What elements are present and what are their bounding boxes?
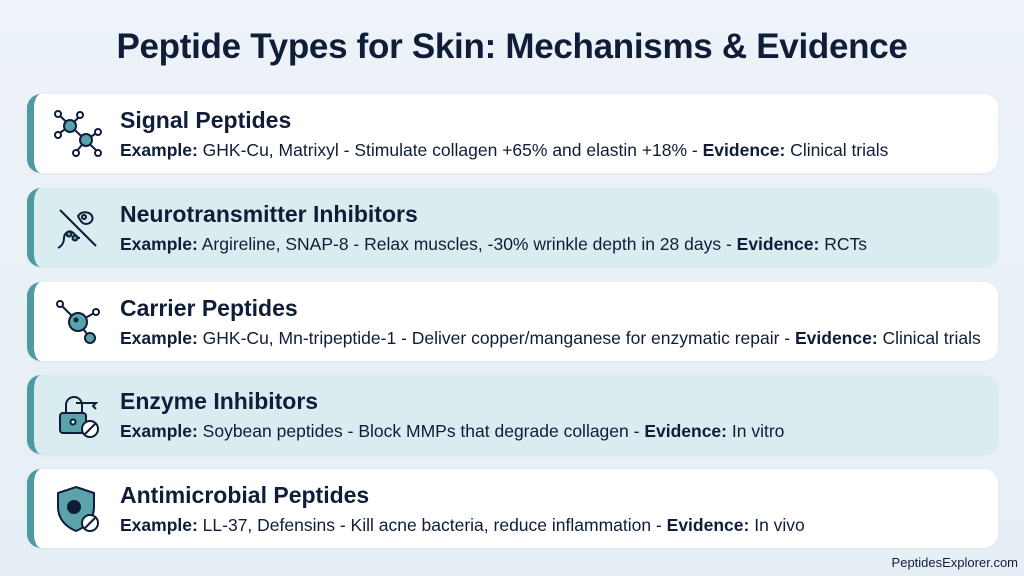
icon: molecule: [54, 110, 102, 157]
text: Example: GHK-Cu, Mn-tripeptide-1 - Deliver copper/manganese for enzymatic repair - Evidence: Clinical trials: [120, 328, 981, 348]
title: Peptide Types for Skin: Mechanisms & Evidence: [116, 27, 908, 66]
icon: carrier molecule: [56, 300, 100, 344]
heading: Signal Peptides: [120, 107, 291, 133]
panel: signal peptides: [27, 94, 998, 173]
panel: neurotransmitter inhibitors: [27, 188, 998, 267]
icon: nerve blocked: [58, 209, 97, 249]
icon: shield: [57, 486, 99, 532]
text: Example: Soybean peptides - Block MMPs that degrade collagen - Evidence: In vitro: [120, 421, 784, 441]
panel: antimicrobial peptides: [27, 469, 998, 548]
heading: Neurotransmitter Inhibitors: [120, 201, 418, 227]
text: Example: Argireline, SNAP-8 - Relax muscles, -30% wrinkle depth in 28 days - Evidence: RCTs: [120, 234, 867, 254]
heading: Antimicrobial Peptides: [120, 482, 369, 508]
icon: lock and key: [59, 396, 99, 438]
footer: PeptidesExplorer.com: [892, 555, 1018, 570]
heading: Enzyme Inhibitors: [120, 388, 318, 414]
panel: carrier peptides: [27, 282, 998, 361]
panel: enzyme inhibitors: [27, 375, 998, 454]
text: Example: GHK-Cu, Matrixyl - Stimulate collagen +65% and elastin +18% - Evidence: Clinical trials: [120, 140, 888, 160]
text: Example: LL-37, Defensins - Kill acne bacteria, reduce inflammation - Evidence: In vivo: [120, 515, 805, 535]
heading: Carrier Peptides: [120, 295, 298, 321]
